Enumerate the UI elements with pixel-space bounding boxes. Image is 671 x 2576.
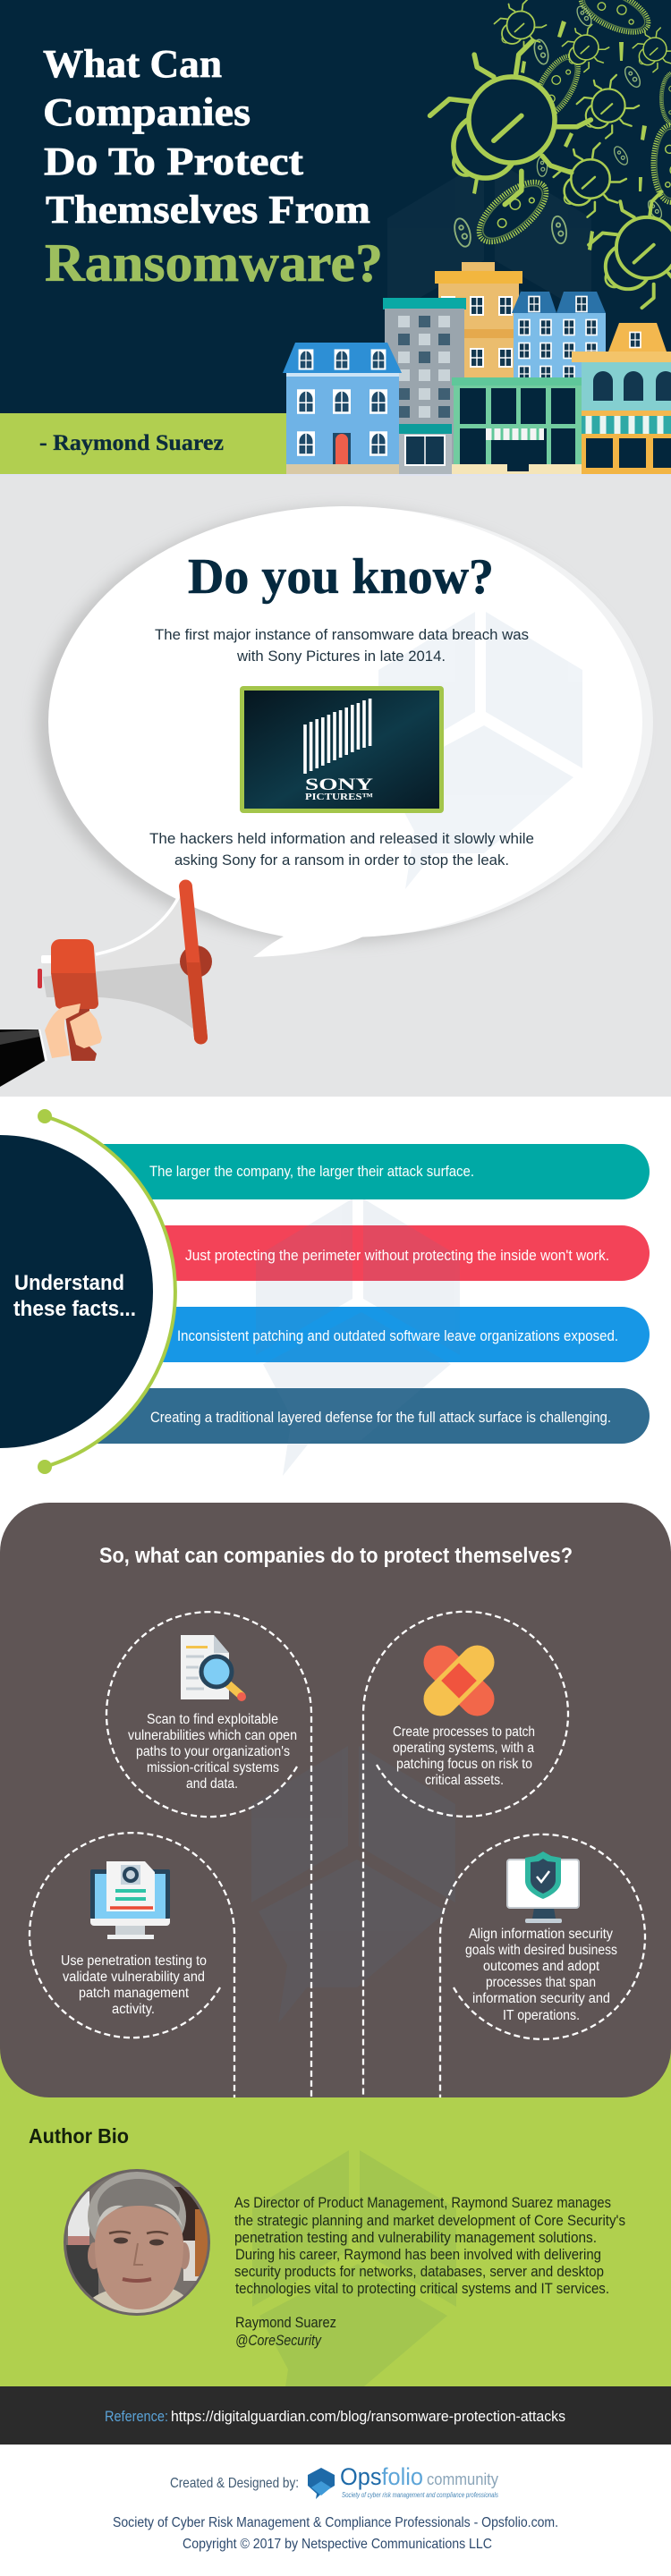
panel: reference bar <box>0 2386 671 2445</box>
text: align <box>465 1927 617 2023</box>
fact pills <box>54 1144 650 1444</box>
text: penetration: validate vulnerability and <box>63 1970 205 1985</box>
text: penetration: Use penetration testing to <box>61 1953 207 1969</box>
image: sony pictures <box>240 686 444 813</box>
heading: do you know: Do you know? <box>188 549 494 605</box>
icon: megaphone <box>0 880 212 1087</box>
title <box>43 42 383 292</box>
building: blue house <box>283 343 402 474</box>
text: reference: https://digitalguardian.com/blog/ransomware-protection-attacks <box>171 2408 565 2425</box>
logo: opsfolio community <box>308 2463 498 2499</box>
watermark: protect panel logo <box>251 1746 455 2023</box>
panel: protect themselves <box>0 1503 671 2097</box>
title: Ransomware? <box>45 233 383 292</box>
text: bio: As Director of Product Management, Raymond Suarez manages <box>234 2194 611 2211</box>
text: fact 3: Inconsistent patching and outdated software leave organizations exposed. <box>177 1328 618 1344</box>
circle: understand these facts <box>0 1108 175 1475</box>
logo: opsfolio community: Society of cyber risk management and compliance professionals <box>342 2491 498 2499</box>
text: hackers: asking Sony for a ransom in order to stop the leak. <box>174 852 509 869</box>
title: Do To Protect <box>44 140 303 183</box>
panel: footer <box>0 2445 671 2576</box>
circle: understand these facts: Understand <box>14 1271 124 1295</box>
panel: header background <box>0 0 671 474</box>
author name: - Raymond Suarez <box>39 431 224 455</box>
watermark: bubble logo <box>378 612 582 889</box>
building: green shop <box>452 377 586 474</box>
text: fact 4: Creating a traditional layered defense for the full attack surface is challenging. <box>150 1410 611 1426</box>
text: bio: Raymond Suarez <box>235 2314 336 2331</box>
speech bubble <box>36 506 653 957</box>
text: patch: critical assets. <box>425 1773 504 1788</box>
panel: green author background <box>0 2044 671 2386</box>
text: reference: Reference: <box>105 2408 168 2425</box>
text: society line: Society of Cyber Risk Management & Compliance Professionals - Opsfolio.com. <box>113 2515 558 2530</box>
text: align: information security and <box>472 1991 610 2006</box>
panel: facts background <box>0 1097 671 1503</box>
text: copyright: Copyright © 2017 by Netspective Communications LLC <box>183 2537 492 2552</box>
text: align: processes that span <box>486 1975 596 1990</box>
panel: do you know background <box>0 474 671 1097</box>
text: scan: Scan to find exploitable <box>147 1712 278 1727</box>
text: bio: During his career, Raymond has been involved with delivering <box>235 2246 601 2263</box>
building: blue tower <box>512 292 606 389</box>
text: fact 1: The larger the company, the larger their attack surface. <box>149 1164 474 1180</box>
title: What Can <box>43 42 222 86</box>
heading: protect themselves: So, what can companies do to protect themselves? <box>99 1544 573 1568</box>
text: penetration <box>61 1953 207 2017</box>
text: hackers: The hackers held information and released it slowly while <box>149 830 534 847</box>
building: orange shop <box>572 323 671 474</box>
text: penetration: patch management <box>79 1986 190 2001</box>
text: fact 2: Just protecting the perimeter without protecting the inside won't work. <box>185 1248 609 1264</box>
illustration: bugs and bacteria <box>430 0 671 308</box>
icon: penetration test monitor <box>90 1861 170 1939</box>
title: Companies <box>43 90 251 134</box>
text: first instance <box>155 626 529 665</box>
text: patch: Create processes to patch <box>393 1724 535 1740</box>
text: bio: technologies vital to protecting critical systems and IT services. <box>235 2280 609 2297</box>
logo: opsfolio community: community <box>427 2470 498 2488</box>
text: patch: operating systems, with a <box>393 1741 534 1756</box>
text: scan: paths to your organization's <box>136 1744 290 1759</box>
text: align: outcomes and adopt <box>483 1959 600 1974</box>
text: align: Align information security <box>469 1927 613 1942</box>
photo: raymond suarez <box>63 2169 211 2318</box>
text: bio: penetration testing and vulnerability management solutions. <box>234 2229 597 2246</box>
circle: understand these facts: these facts... <box>13 1297 136 1321</box>
text: align: IT operations. <box>503 2008 580 2023</box>
icon: shield monitor <box>507 1852 579 1923</box>
text: scan: mission-critical systems <box>147 1760 279 1775</box>
icon: bandage <box>417 1639 501 1723</box>
text: scan: vulnerabilities which can open <box>128 1728 297 1743</box>
illustration: city buildings <box>283 262 671 474</box>
dashed connectors and circles <box>30 1612 645 2097</box>
watermark: facts logo <box>256 1199 460 1476</box>
watermark: header logo <box>387 160 591 437</box>
image: sony pictures: PICTURES™ <box>305 792 374 802</box>
text: bio <box>234 2194 625 2349</box>
panel: author band <box>0 413 286 474</box>
icon: scan document <box>181 1635 246 1701</box>
text: penetration: activity. <box>112 2002 155 2017</box>
text: first instance: The first major instance of ransomware data breach was <box>155 626 529 643</box>
text: patch <box>393 1724 535 1788</box>
building: grey tower <box>383 298 466 474</box>
image: sony pictures: SONY <box>305 775 373 794</box>
text: align: goals with desired business <box>465 1943 617 1958</box>
building: yellow tower <box>435 262 522 382</box>
text: first instance: with Sony Pictures in late 2014. <box>236 648 446 665</box>
title: Themselves From <box>46 188 370 232</box>
text: scan <box>128 1712 297 1792</box>
text: bio: security products for networks, databases, server and desktop <box>234 2263 604 2280</box>
text: scan: and data. <box>186 1776 238 1792</box>
text: bio: @CoreSecurity <box>235 2332 322 2349</box>
text: patch: patching focus on risk to <box>396 1757 532 1772</box>
heading: author bio: Author Bio <box>29 2124 129 2148</box>
logo: opsfolio community: Opsfolio <box>340 2463 423 2490</box>
watermark: author logo <box>252 2150 456 2428</box>
text: hackers <box>149 830 534 869</box>
text: created by: Created & Designed by: <box>170 2476 299 2491</box>
text: bio: the strategic planning and market development of Core Security's <box>234 2212 625 2229</box>
